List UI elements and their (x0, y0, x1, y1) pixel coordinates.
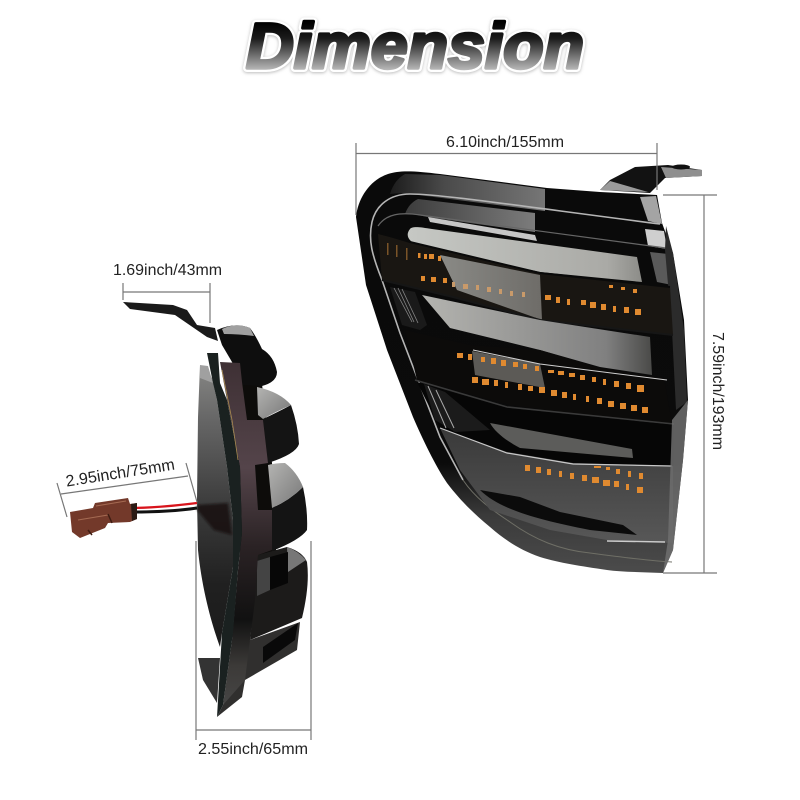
LED band 2 (405, 330, 672, 424)
connector body (70, 498, 137, 538)
center strip (220, 362, 272, 705)
title: Dimension: Dimension (246, 10, 584, 82)
dimension: width 6.10inch: 6.10inch/155mm (446, 134, 564, 151)
segment 5 (217, 622, 300, 717)
title: Dimension: Dimension (246, 11, 584, 83)
vent (424, 384, 490, 432)
silver inner trim (370, 194, 660, 480)
tail light: side view (123, 302, 308, 717)
LED band 2 row B (472, 377, 478, 383)
dimension: bracket 1.69inch (113, 262, 222, 323)
connector dark mount (197, 503, 232, 535)
dimension: depth 2.55inch: 2.55inch/65mm (198, 741, 308, 758)
band 1 separators (380, 233, 670, 287)
top rim highlight (390, 174, 545, 211)
smoke lens lower (440, 428, 673, 543)
band 2 line (473, 350, 667, 380)
lamp housing (356, 171, 688, 573)
dimension: width 6.10inch (356, 134, 657, 215)
upper lens panel (408, 227, 642, 282)
dimension: bracket 1.69inch: 1.69inch/43mm (113, 262, 222, 279)
dimension: wire 2.95inch: 2.95inch/75mm (65, 457, 176, 491)
bottom tab (198, 658, 220, 703)
top cap (217, 325, 277, 386)
plate top tab (200, 365, 213, 383)
LED row cluster (418, 253, 648, 493)
band 3 highlight (440, 428, 672, 466)
right pillar strip (650, 252, 672, 285)
lower dark slot (480, 490, 637, 535)
LED band 2 row A (457, 353, 463, 358)
segment backing (235, 372, 276, 562)
segment 4 (250, 547, 308, 640)
title: Dimension: Dimension (246, 10, 584, 82)
side bracket (123, 302, 218, 341)
LED band 1 (378, 234, 673, 335)
mounting bracket (600, 164, 702, 193)
back plate (197, 365, 233, 647)
dimension: wire 2.95inch (57, 457, 197, 517)
tail light: rear view (356, 164, 702, 573)
LED band 3 (525, 465, 530, 471)
segment 3 (272, 487, 307, 551)
segment 4 window (257, 557, 270, 596)
wiring connector (70, 498, 197, 538)
lamp dark left vents (390, 287, 427, 330)
faint left LEDs (387, 243, 408, 260)
amber hairline (222, 370, 238, 460)
gray reflection (490, 423, 633, 458)
dimension: height 7.59inch: 7.59inch/193mm (709, 332, 726, 450)
dark divider (207, 353, 242, 717)
dark band 3 (417, 382, 674, 466)
wires (130, 503, 197, 508)
dimension: depth 2.55inch (196, 541, 311, 758)
dimension: height 7.59inch (663, 195, 726, 573)
segment 2 (263, 405, 299, 463)
lower lens panel (422, 295, 652, 375)
second band (405, 199, 535, 232)
